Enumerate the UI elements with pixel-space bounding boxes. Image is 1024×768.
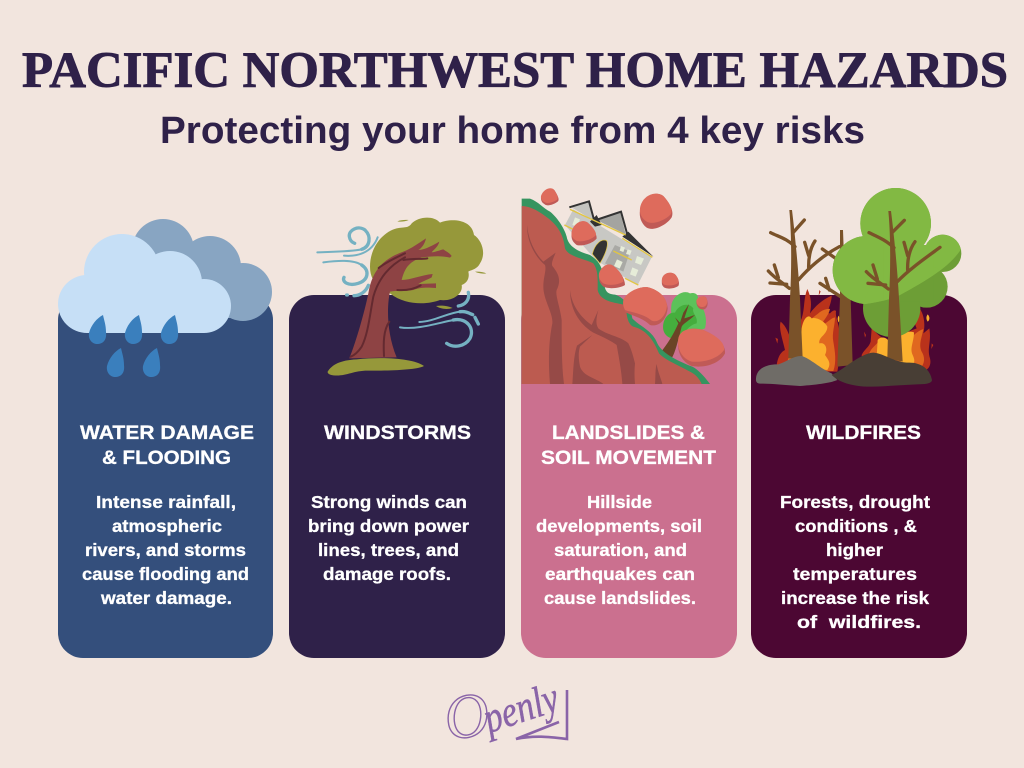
heading: wildfires: WILDFIRES bbox=[806, 422, 921, 444]
text: windstorms: bring down power bbox=[308, 516, 469, 536]
boulders bbox=[541, 188, 725, 367]
green tree bbox=[833, 188, 961, 362]
panel: water damage bbox=[58, 219, 273, 658]
text: wildfires: higher bbox=[826, 540, 883, 560]
icon: forest fire bbox=[756, 188, 961, 387]
tree on slope bbox=[660, 292, 706, 358]
text: wildfires: conditions , & bbox=[795, 516, 917, 536]
text: water damage bbox=[82, 492, 249, 608]
text: water damage: rivers, and storms bbox=[85, 540, 246, 560]
text: water damage: water damage. bbox=[100, 588, 232, 608]
text: landslides: developments, soil bbox=[536, 516, 702, 536]
panel: windstorms bbox=[289, 218, 505, 658]
house bbox=[564, 201, 653, 285]
heading: water damage: WATER DAMAGE bbox=[80, 422, 254, 444]
text: landslides: cause landslides. bbox=[544, 588, 696, 608]
text: landslides: saturation, and bbox=[554, 540, 687, 560]
heading: water damage bbox=[80, 422, 254, 469]
bare trees bbox=[768, 210, 853, 367]
text: landslides: Hillside bbox=[587, 492, 652, 512]
heading: landslides bbox=[541, 422, 716, 469]
flames bbox=[775, 289, 933, 372]
text: windstorms: Strong winds can bbox=[311, 492, 467, 512]
logo: Openly bbox=[438, 674, 567, 755]
logo: Openly: O bbox=[438, 679, 496, 755]
heading: landslides: LANDSLIDES & bbox=[552, 422, 705, 444]
text: windstorms bbox=[308, 492, 469, 584]
text: water damage: Intense rainfall, bbox=[96, 492, 236, 512]
text: windstorms: damage roofs. bbox=[323, 564, 451, 584]
heading: water damage: & FLOODING bbox=[102, 447, 231, 469]
text: landslides: earthquakes can bbox=[545, 564, 695, 584]
text: landslides bbox=[536, 492, 702, 608]
text: water damage: atmospheric bbox=[112, 516, 222, 536]
subtitle: Protecting your home from 4 key risks bbox=[160, 110, 865, 152]
text: wildfires: temperatures bbox=[793, 564, 917, 584]
text: wildfires bbox=[780, 492, 930, 632]
slope bbox=[522, 199, 710, 384]
text: wildfires: Forests, drought bbox=[780, 492, 930, 512]
text: wildfires: increase the risk bbox=[781, 588, 929, 608]
rocks bbox=[756, 353, 932, 387]
text: windstorms: lines, trees, and bbox=[318, 540, 459, 560]
logo: Openly: penly bbox=[475, 674, 565, 743]
text: water damage: cause flooding and bbox=[82, 564, 249, 584]
icon: rain clouds bbox=[58, 219, 272, 377]
panel: landslides bbox=[521, 188, 737, 658]
panel: wildfires bbox=[751, 188, 967, 658]
icon: landslide bbox=[522, 188, 725, 384]
heading: windstorms: WINDSTORMS bbox=[324, 422, 471, 444]
text: wildfires: of wildfires. bbox=[797, 612, 921, 632]
icon: tree in wind bbox=[317, 218, 486, 376]
title: PACIFIC NORTHWEST HOME HAZARDS bbox=[22, 43, 1008, 99]
heading: landslides: SOIL MOVEMENT bbox=[541, 447, 716, 469]
